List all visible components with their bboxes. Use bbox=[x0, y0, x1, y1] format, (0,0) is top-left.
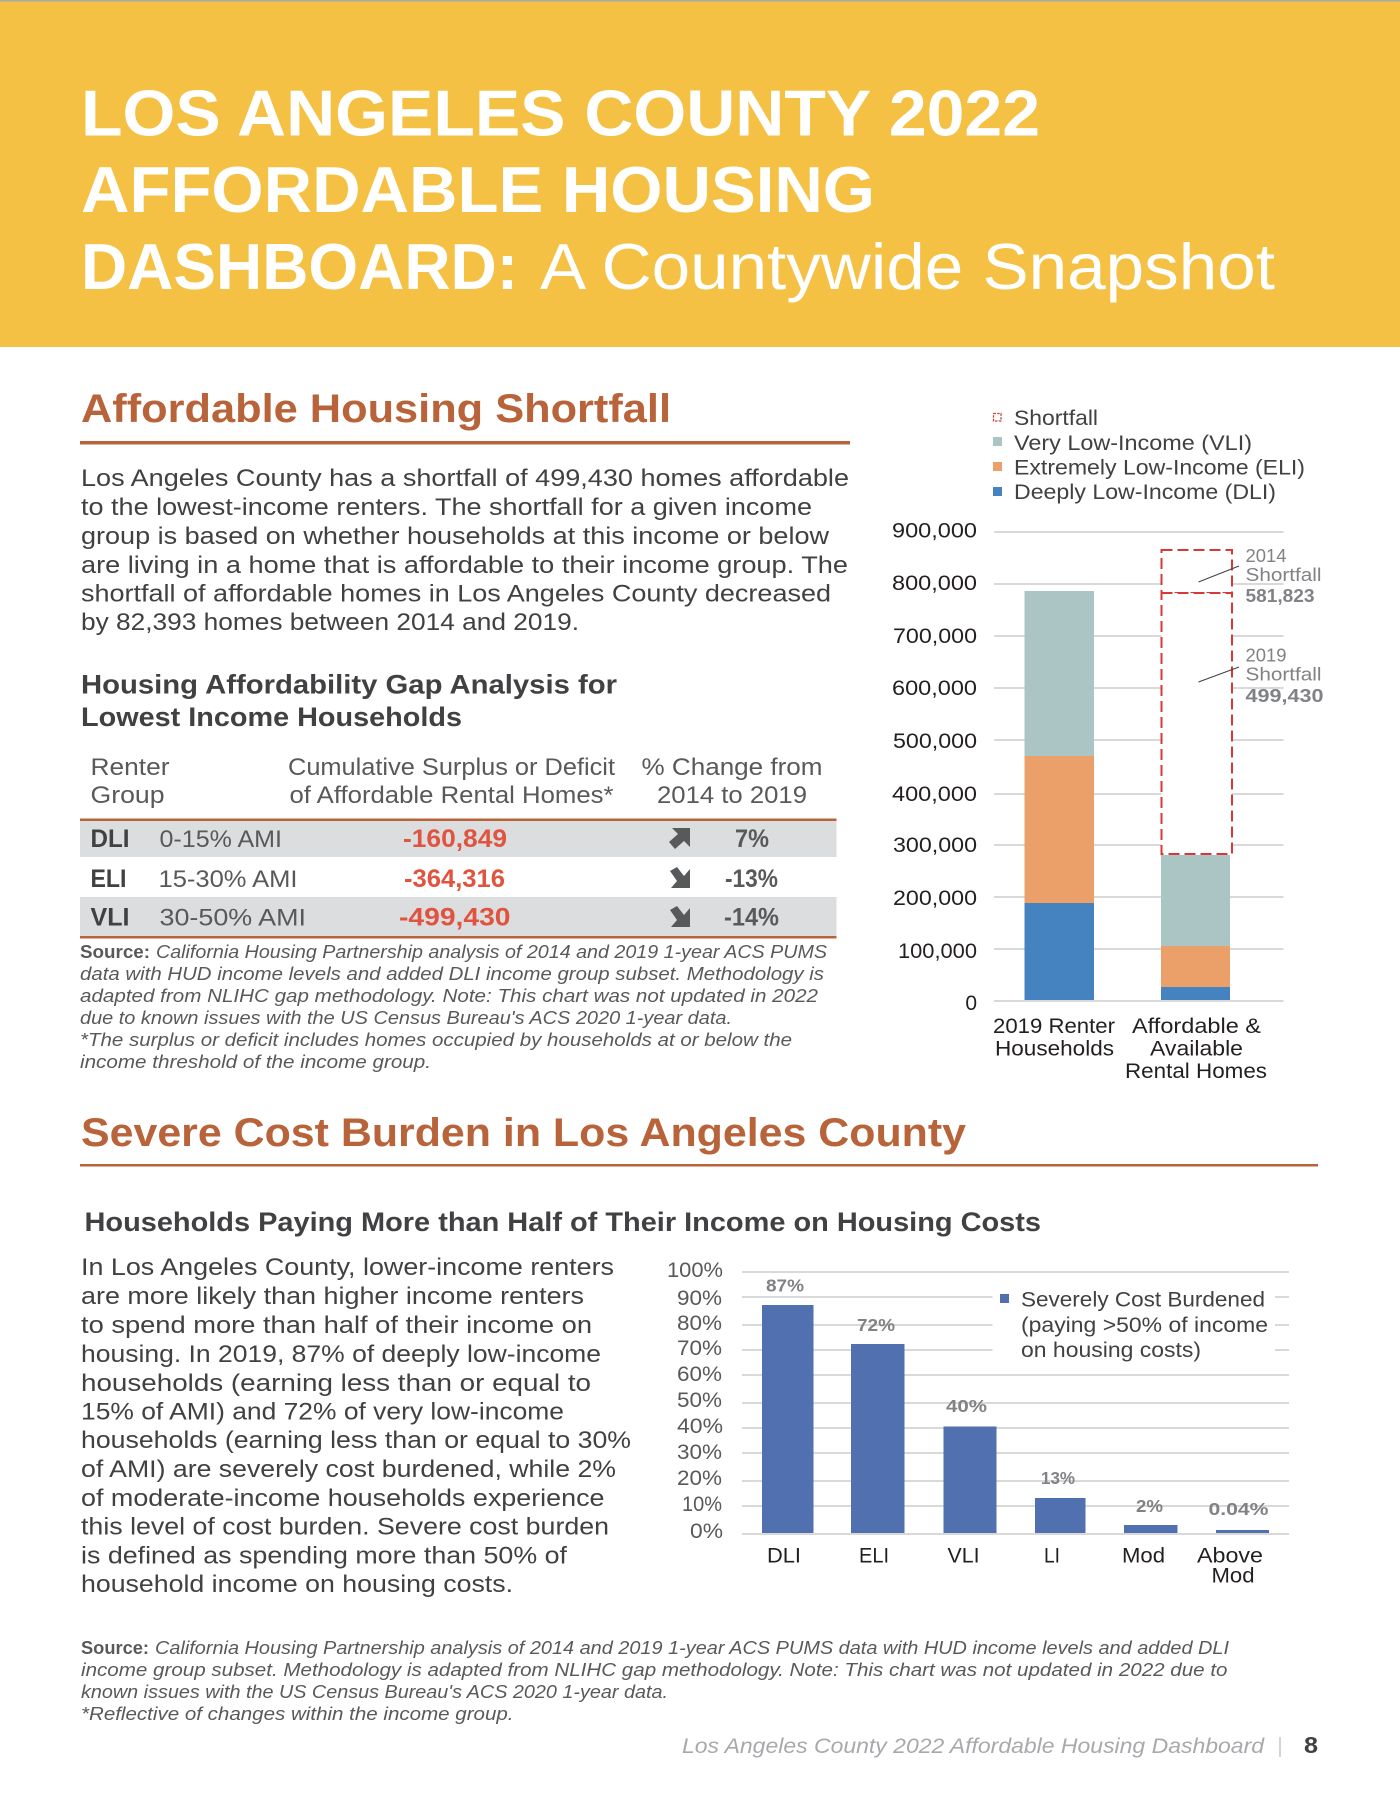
footer: Los Angeles County 2022 Affordable Housing Dashboard bbox=[682, 1735, 1265, 1758]
heading: Affordable Housing Shortfall: Affordable Housing Shortfall bbox=[81, 387, 671, 431]
legend: severely cost burdened bbox=[992, 1285, 1275, 1363]
value labels: 87% bbox=[766, 1276, 804, 1296]
header banner bbox=[0, 0, 1400, 347]
bar: affordable and available rental homes bbox=[1161, 855, 1230, 1000]
title: A Countywide Snapshot bbox=[540, 230, 1275, 303]
legend: stacked bar chart: Shortfall bbox=[1014, 407, 1098, 430]
y axis labels: 700,000 bbox=[893, 625, 977, 648]
y axis labels: 400,000 bbox=[892, 783, 977, 806]
legend: severely cost burdened: on housing costs) bbox=[1021, 1339, 1201, 1362]
y axis labels: 60% bbox=[677, 1363, 722, 1386]
y axis labels: 40% bbox=[677, 1415, 723, 1438]
row: VLI: -14% bbox=[724, 904, 779, 932]
icon: down arrow bbox=[670, 867, 690, 888]
x axis labels: DLI bbox=[767, 1544, 801, 1568]
row: ELI: -364,316 bbox=[404, 865, 505, 893]
y axis labels: 80% bbox=[677, 1312, 722, 1335]
icon: up arrow bbox=[669, 828, 690, 849]
value labels: 0.04% bbox=[1208, 1499, 1269, 1519]
text block: shortfall description: are living in a home that is affordable to their income group. The bbox=[81, 552, 848, 579]
stacked bar chart: renter households vs affordable homes bbox=[892, 520, 1324, 1083]
title: DASHBOARD: bbox=[81, 230, 518, 303]
y axis labels bbox=[892, 520, 977, 1015]
row: VLI bbox=[90, 904, 779, 932]
row: VLI: 30-50% AMI bbox=[160, 904, 306, 932]
legend: stacked bar chart: Very Low-Income (VLI) bbox=[1014, 432, 1252, 455]
x axis labels: LI bbox=[1044, 1544, 1060, 1568]
x axis labels: Available bbox=[1150, 1036, 1243, 1060]
y axis labels: 100% bbox=[667, 1259, 723, 1282]
table: housing affordability gap bbox=[80, 754, 836, 938]
source note: table: adapted from NLIHC gap methodology. Note: This chart was not updated in 2022 bbox=[80, 985, 819, 1006]
bar: 2019 renter households bbox=[1024, 591, 1094, 1000]
table header row: % Change from bbox=[642, 754, 822, 781]
icon: down arrow bbox=[670, 906, 690, 927]
y axis labels: 500,000 bbox=[893, 730, 977, 753]
x axis labels: Mod bbox=[1122, 1544, 1165, 1568]
x axis labels: Above bbox=[1197, 1544, 1263, 1568]
text block: cost burden description: is defined as spending more than 50% of bbox=[81, 1542, 567, 1570]
callout: 2019 shortfall: Shortfall bbox=[1246, 664, 1322, 684]
table header row: of Affordable Rental Homes* bbox=[290, 782, 614, 809]
text block: shortfall description: Los Angeles County has a shortfall of 499,430 homes affordable bbox=[81, 465, 849, 492]
subheading: gap analysis: Lowest Income Households bbox=[81, 702, 462, 732]
legend: stacked bar chart: Extremely Low-Income (ELI) bbox=[1014, 456, 1305, 480]
text block: shortfall description: by 82,393 homes between 2014 and 2019. bbox=[81, 609, 579, 636]
legend: stacked bar chart: Deeply Low-Income (DLI) bbox=[1014, 481, 1276, 504]
bar chart: severely cost burdened households bbox=[667, 1259, 1289, 1588]
row: VLI: VLI bbox=[90, 904, 130, 932]
callout: 2019 shortfall: 2019 bbox=[1246, 644, 1286, 666]
text block: cost burden description: to spend more than half of their income on bbox=[81, 1312, 592, 1339]
legend: severely cost burdened: Severely Cost Burdened bbox=[1021, 1288, 1265, 1312]
value labels: 2% bbox=[1136, 1496, 1163, 1516]
row: ELI: ELI bbox=[90, 865, 126, 893]
text block: cost burden description: of AMI) are severely cost burdened, while 2% bbox=[81, 1456, 616, 1483]
source note: cost burden: income group subset. Methodology is adapted from NLIHC gap methodology. Note: This chart was not updated in 2022 due to bbox=[81, 1659, 1228, 1680]
x axis labels bbox=[767, 1544, 1263, 1588]
value labels: 72% bbox=[857, 1315, 895, 1335]
text block: cost burden description: 15% of AMI) and 72% of very low-income bbox=[81, 1398, 564, 1426]
source note: table: due to known issues with the US Census Bureau's ACS 2020 1-year data. bbox=[80, 1007, 732, 1028]
row: ELI bbox=[90, 865, 778, 893]
table header row: Cumulative Surplus or Deficit bbox=[288, 754, 615, 781]
table header row bbox=[90, 754, 822, 809]
row: VLI: -499,430 bbox=[399, 904, 510, 932]
x axis labels bbox=[993, 1014, 1267, 1083]
heading: Severe Cost Burden: Severe Cost Burden in Los Angeles County bbox=[81, 1111, 967, 1155]
text block: cost burden description: In Los Angeles County, lower-income renters bbox=[81, 1254, 614, 1281]
shortfall dashed boxes bbox=[1162, 550, 1232, 854]
source note: table: data with HUD income levels and added DLI income group subset. Methodology is bbox=[80, 963, 824, 984]
value labels bbox=[766, 1276, 1269, 1519]
y axis labels: 0 bbox=[965, 992, 977, 1015]
y axis labels: 800,000 bbox=[892, 572, 977, 595]
source note: cost burden: *Reflective of changes within the income group. bbox=[81, 1703, 514, 1724]
row: DLI bbox=[90, 825, 769, 853]
y axis labels: 50% bbox=[677, 1389, 722, 1412]
source note: table: California Housing Partnership analysis of 2014 and 2019 1-year ACS PUMS bbox=[156, 941, 828, 962]
y axis labels: 200,000 bbox=[893, 887, 977, 910]
y axis labels: 0% bbox=[690, 1520, 723, 1543]
y axis labels bbox=[667, 1259, 723, 1543]
value labels: 13% bbox=[1041, 1468, 1075, 1488]
row: DLI: DLI bbox=[90, 825, 130, 853]
subheading: gap analysis: Housing Affordability Gap Analysis for bbox=[81, 670, 618, 700]
table header row: Group bbox=[90, 782, 164, 809]
legend: stacked bar chart bbox=[993, 407, 1305, 504]
text block: shortfall description: to the lowest-income renters. The shortfall for a given income bbox=[81, 494, 812, 521]
text block: cost burden description bbox=[81, 1254, 631, 1598]
y axis labels: 100,000 bbox=[898, 940, 977, 963]
x axis labels: Rental Homes bbox=[1125, 1059, 1267, 1083]
x axis labels: Affordable & bbox=[1132, 1014, 1261, 1038]
y axis labels: 10% bbox=[682, 1493, 722, 1516]
text block: shortfall description: shortfall of affordable homes in Los Angeles County decreased bbox=[81, 580, 831, 608]
bars bbox=[762, 1305, 1269, 1533]
footer: 8 bbox=[1304, 1732, 1318, 1758]
row: ELI: -13% bbox=[725, 865, 778, 893]
row: ELI: 15-30% AMI bbox=[158, 866, 298, 893]
row: DLI: 0-15% AMI bbox=[160, 826, 282, 853]
table header row: Renter bbox=[90, 754, 170, 781]
y axis labels: 300,000 bbox=[893, 834, 977, 857]
text block: cost burden description: of moderate-income households experience bbox=[81, 1485, 604, 1512]
source note: table: income threshold of the income group. bbox=[80, 1051, 431, 1072]
x axis labels: 2019 Renter bbox=[993, 1014, 1115, 1038]
callout: 2014 shortfall bbox=[1198, 545, 1322, 606]
y axis labels: 30% bbox=[677, 1441, 722, 1464]
y axis labels: 20% bbox=[677, 1467, 722, 1490]
source note: table: *The surplus or deficit includes homes occupied by households at or below the bbox=[80, 1029, 792, 1050]
title: LOS ANGELES COUNTY 2022 bbox=[81, 76, 1040, 150]
x axis labels: Households bbox=[995, 1036, 1114, 1060]
source note: cost burden: California Housing Partnership analysis of 2014 and 2019 1-year ACS PUMS data with HUD income levels and added DLI bbox=[155, 1637, 1229, 1658]
text block: cost burden description: this level of cost burden. Severe cost burden bbox=[81, 1514, 609, 1540]
title bbox=[81, 76, 1275, 303]
source note: table: Source: bbox=[80, 941, 150, 962]
text block: cost burden description: are more likely than higher income renters bbox=[81, 1283, 584, 1310]
legend: severely cost burdened: (paying >50% of income bbox=[1021, 1314, 1268, 1337]
title: AFFORDABLE HOUSING bbox=[81, 153, 875, 226]
source note: cost burden bbox=[81, 1637, 1229, 1724]
source note: table bbox=[80, 941, 828, 1072]
value labels: 40% bbox=[946, 1396, 988, 1416]
row: DLI: 7% bbox=[735, 825, 769, 853]
row: DLI: -160,849 bbox=[403, 825, 507, 853]
y axis labels: 900,000 bbox=[892, 520, 977, 542]
text block: cost burden description: housing. In 2019, 87% of deeply low-income bbox=[81, 1341, 601, 1368]
callout: 2014 shortfall: Shortfall bbox=[1246, 564, 1322, 585]
text block: shortfall description: group is based on whether households at this income or below bbox=[81, 523, 830, 550]
x axis labels: VLI bbox=[948, 1544, 980, 1568]
text block: shortfall description bbox=[81, 465, 849, 636]
subheading: households paying more than half: Households Paying More than Half of Their Income on Housing Costs bbox=[84, 1207, 1041, 1237]
y axis labels: 600,000 bbox=[892, 677, 977, 700]
text block: cost burden description: households (earning less than or equal to bbox=[81, 1370, 591, 1397]
x axis labels: ELI bbox=[859, 1544, 889, 1568]
callout: 2014 shortfall: 2014 bbox=[1246, 545, 1286, 566]
subheading: gap analysis bbox=[81, 670, 618, 732]
y axis labels: 90% bbox=[677, 1287, 722, 1310]
callout: 2019 shortfall: 499,430 bbox=[1246, 685, 1324, 706]
source note: cost burden: known issues with the US Census Bureau's ACS 2020 1-year data. bbox=[81, 1681, 668, 1702]
x axis labels: Mod bbox=[1212, 1564, 1254, 1588]
source note: cost burden: Source: bbox=[81, 1637, 149, 1658]
table header row: 2014 to 2019 bbox=[657, 782, 807, 809]
text block: cost burden description: households (earning less than or equal to 30% bbox=[81, 1427, 631, 1454]
callout: 2019 shortfall bbox=[1198, 644, 1324, 706]
callout: 2014 shortfall: 581,823 bbox=[1246, 585, 1314, 606]
text block: cost burden description: household income on housing costs. bbox=[81, 1571, 513, 1598]
y axis labels: 70% bbox=[677, 1337, 722, 1360]
heading: Affordable Housing Shortfall bbox=[80, 387, 850, 444]
